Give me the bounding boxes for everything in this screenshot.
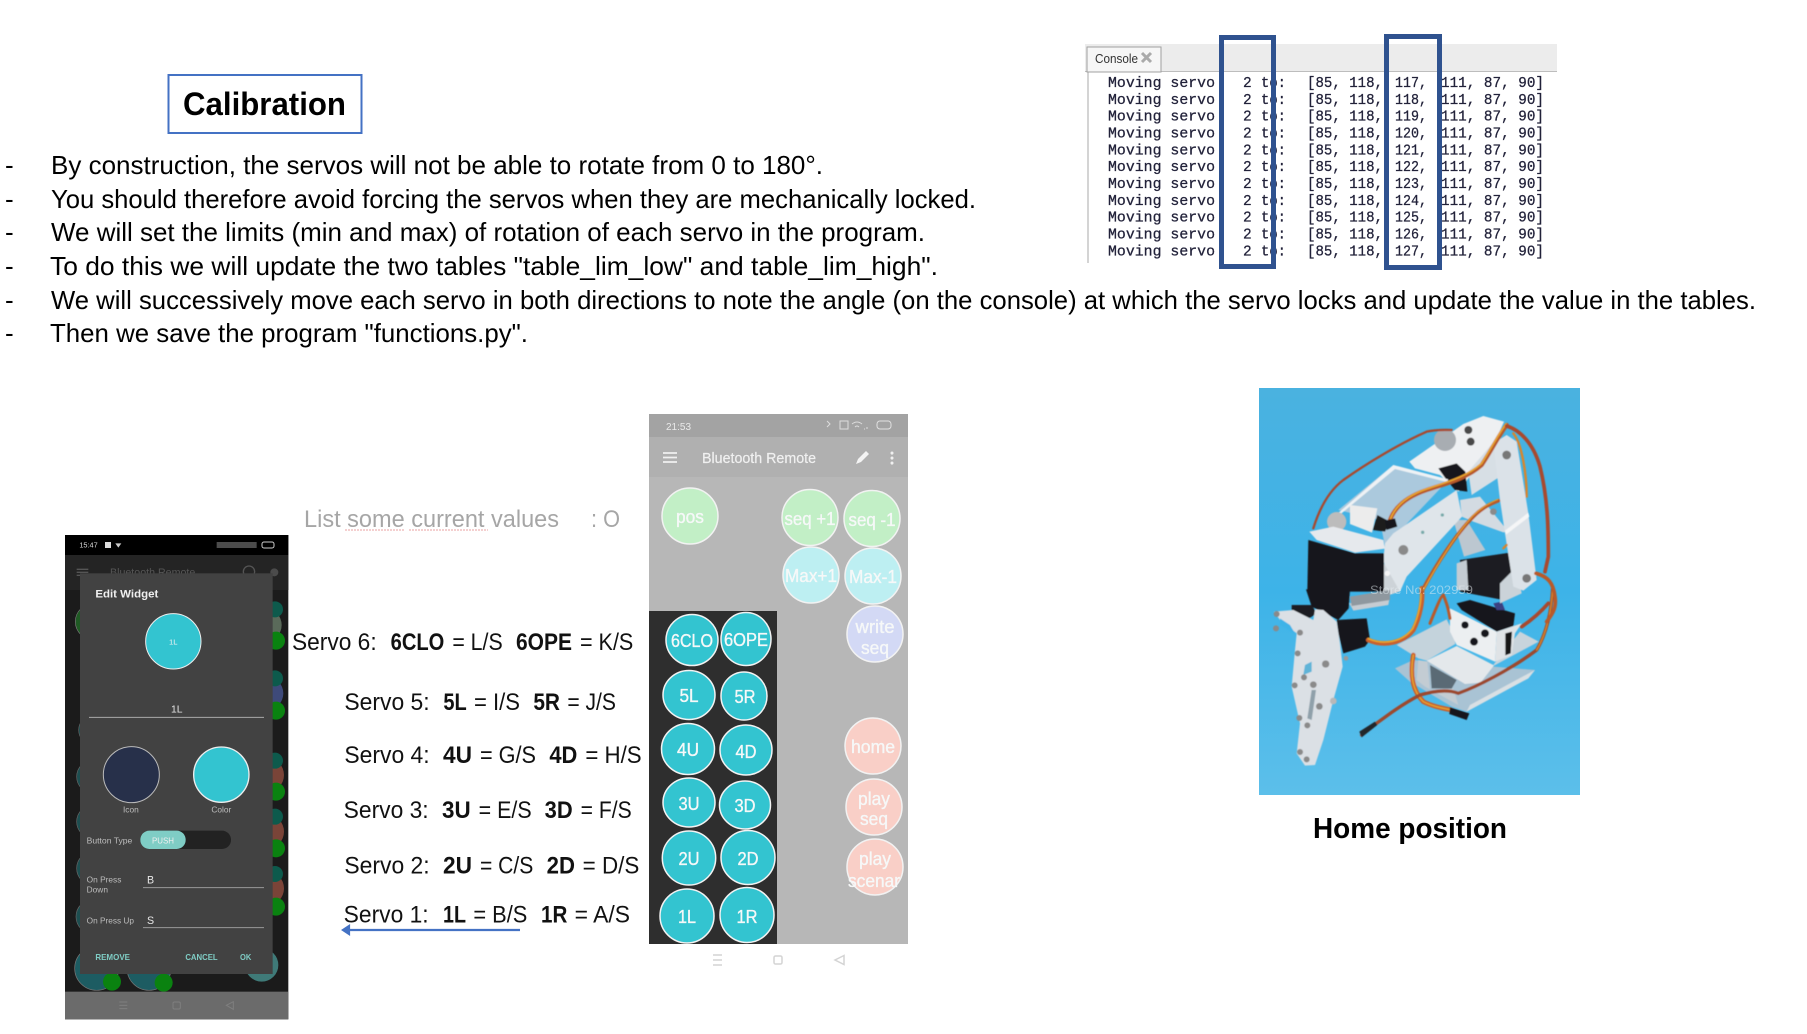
text block: servo key mappings: Servo 5: (344, 689, 430, 716)
text block: servo key mappings: = C/S (480, 852, 533, 879)
console output rows: [85, 118, (1307, 76, 1383, 92)
caption: Home position: Home position (1313, 813, 1507, 845)
console output rows: 2 (1243, 76, 1252, 92)
console output rows: Moving servo (1108, 126, 1215, 142)
text block: calibration instructions: - (5, 184, 14, 214)
control buttons: 3U (678, 794, 700, 814)
lower cables (1362, 588, 1553, 735)
elbow bracket (1338, 465, 1448, 547)
console output rows: Moving servo (1108, 194, 1215, 210)
text block: servo key mappings: 3D (545, 797, 573, 824)
console output rows: Moving servo (1108, 143, 1215, 159)
console output rows: to: (1261, 143, 1286, 159)
console output rows: 2 (1243, 93, 1252, 109)
console output rows: 111, 87, 90] (1441, 211, 1544, 227)
console output rows: to: (1261, 228, 1286, 244)
Edit Widget dialog: PUSH (152, 835, 174, 845)
control buttons: play (858, 789, 890, 809)
text block: servo key mappings: Servo 2: (344, 852, 430, 879)
lower assembly (1395, 600, 1539, 712)
control buttons: seq (861, 638, 889, 658)
console output rows: [85, 118, (1307, 228, 1383, 244)
Edit Widget dialog: Button Type (87, 835, 133, 845)
console output rows: 2 (1243, 110, 1252, 126)
control buttons: 4U (677, 740, 699, 760)
control buttons: Max+1 (785, 566, 837, 586)
control buttons: 4D (736, 742, 756, 762)
console output rows: 111, 87, 90] (1441, 143, 1544, 159)
text block: calibration instructions: - (5, 318, 14, 348)
console output rows: Moving servo (1108, 211, 1215, 227)
text block: servo key mappings: Servo 4: (344, 742, 430, 769)
console output rows: to: (1261, 194, 1286, 210)
console output rows: Moving servo (1108, 76, 1215, 92)
console output rows: to: (1261, 177, 1286, 193)
panel: Edit Widget phone screenshot: Bluetooth Remote (110, 567, 195, 579)
control buttons: seq (860, 809, 888, 829)
control buttons: 6CLO (671, 631, 713, 651)
text block: servo key mappings: 6OPE (516, 629, 572, 656)
console output rows: Moving servo (1108, 177, 1215, 193)
console output rows: to: (1261, 110, 1286, 126)
navigation icons (713, 955, 844, 965)
photo: robot arm in home position: Store No: 202959 (1370, 583, 1473, 597)
Edit Widget dialog: Edit Widget (95, 588, 159, 600)
Edit Widget dialog: On Press (87, 875, 121, 885)
console output rows: 111, 87, 90] (1441, 228, 1544, 244)
text block: servo key mappings: = K/S (580, 629, 633, 656)
text: list some current values: : O (591, 506, 620, 533)
console output rows: [85, 118, (1307, 194, 1383, 210)
console output rows: Moving servo (1108, 110, 1215, 126)
text block: servo key mappings: = D/S (583, 852, 639, 879)
text block: servo key mappings: 5L (443, 689, 467, 716)
console output rows: [85, 118, (1307, 126, 1383, 142)
Edit Widget dialog (80, 573, 273, 974)
text block: servo key mappings: 2D (547, 852, 575, 879)
console output rows: to: (1261, 76, 1286, 92)
Edit Widget dialog: 1L (169, 637, 178, 646)
console output rows: 2 (1243, 160, 1252, 176)
console output rows: [85, 118, (1307, 110, 1383, 126)
console output rows: 2 (1243, 244, 1252, 260)
text block: servo key mappings: = I/S (474, 689, 520, 716)
control buttons: play (859, 849, 891, 869)
panel: Bluetooth Remote phone screenshot: Bluetooth Remote (702, 450, 816, 467)
control buttons (660, 488, 903, 943)
console output rows: 2 (1243, 143, 1252, 159)
dimmed background buttons (75, 601, 285, 992)
text block: servo key mappings: = H/S (585, 742, 642, 769)
Edit Widget dialog: Down (87, 885, 108, 895)
console output rows: [85, 118, (1307, 177, 1383, 193)
panel: Edit Widget phone screenshot: 15:47 (79, 541, 98, 550)
control buttons: 5R (734, 687, 756, 707)
title: Calibration: Calibration (183, 86, 346, 122)
console output rows: 111, 87, 90] (1441, 244, 1544, 260)
Edit Widget dialog: S (147, 915, 154, 927)
text block: calibration instructions: We will successively move each servo in both directions to note the angle (on the console) at which the servo locks and update the value in the tables. (51, 285, 1756, 315)
Edit Widget dialog: On Press Up (87, 915, 134, 925)
console output rows: 125, (1395, 211, 1427, 227)
Edit Widget dialog: Icon (123, 805, 139, 815)
control buttons: seq -1 (848, 510, 896, 530)
console output rows: 111, 87, 90] (1441, 177, 1544, 193)
text block: servo key mappings: = J/S (567, 689, 616, 716)
console output rows: 124, (1395, 194, 1427, 210)
arrow: blue left arrow under Servo 1 (343, 926, 520, 934)
console output rows: 111, 87, 90] (1441, 110, 1544, 126)
console output rows: Moving servo (1108, 93, 1215, 109)
text block: servo key mappings: = A/S (575, 901, 630, 928)
control buttons: 3D (734, 796, 756, 816)
console output rows: 117, (1395, 76, 1427, 92)
control buttons: 5L (680, 686, 698, 706)
Edit Widget dialog: CANCEL (185, 952, 218, 962)
control buttons: 1L (678, 907, 696, 927)
panel: console screenshot (1085, 36, 1557, 268)
text block: calibration instructions: To do this we will update the two tables "table_lim_low" and table_lim_high". (50, 251, 938, 281)
control buttons: pos (676, 507, 704, 527)
console output rows: Moving servo (1108, 244, 1215, 260)
text block: calibration instructions: - (5, 150, 14, 180)
text block: servo key mappings: 1R (541, 901, 567, 928)
Edit Widget dialog: Color (211, 805, 231, 815)
control buttons: 2U (678, 849, 700, 869)
text block: servo key mappings: Servo 6: (292, 629, 377, 656)
control buttons: scenar (848, 871, 900, 891)
text block: servo key mappings: = E/S (479, 797, 532, 824)
console output rows: [85, 118, (1307, 93, 1383, 109)
console output rows: 2 (1243, 211, 1252, 227)
console output rows: 111, 87, 90] (1441, 160, 1544, 176)
text block: servo key mappings: 1L (443, 901, 466, 928)
text block: servo key mappings: = B/S (473, 901, 527, 928)
rear strut, back servo and long arm (1307, 416, 1537, 603)
title: Calibration (168, 75, 362, 133)
text block: servo key mappings: 3U (442, 797, 471, 824)
text block: calibration instructions: By construction, the servos will not be able to rotate from 0 to 180°. (51, 150, 823, 180)
text block: servo key mappings: 4D (549, 742, 577, 769)
text block: calibration instructions: - (5, 217, 14, 247)
highlight box: servo number column (1222, 38, 1274, 266)
text block: servo key mappings: Servo 3: (344, 797, 429, 824)
upper cables (1313, 424, 1555, 622)
console output rows: 111, 87, 90] (1441, 126, 1544, 142)
control buttons: 1R (736, 907, 758, 927)
console output rows: to: (1261, 211, 1286, 227)
console output rows: to: (1261, 93, 1286, 109)
console output rows (1108, 76, 1544, 260)
console tab (1087, 47, 1161, 72)
control buttons: home (851, 737, 895, 757)
console output rows: [85, 118, (1307, 160, 1383, 176)
console output rows: to: (1261, 244, 1286, 260)
console output rows: 122, (1395, 160, 1427, 176)
text block: servo key mappings: = G/S (480, 742, 536, 769)
text block: calibration instructions (5, 150, 1756, 348)
console output rows: 2 (1243, 228, 1252, 244)
text block: servo key mappings (292, 629, 642, 928)
panel: Edit Widget phone screenshot (65, 535, 288, 1019)
text block: servo key mappings: 2U (443, 852, 472, 879)
console output rows: [85, 118, (1307, 143, 1383, 159)
dark button column background (649, 611, 777, 944)
text block: servo key mappings: = L/S (452, 629, 503, 656)
text: list some current values: List some current values (304, 506, 559, 533)
console output rows: 2 (1243, 194, 1252, 210)
console output rows: 111, 87, 90] (1441, 194, 1544, 210)
console output rows: 121, (1395, 143, 1427, 159)
console output rows: 126, (1395, 228, 1427, 244)
large servo lower, gripper (1273, 588, 1553, 766)
highlight box: angle column (1386, 36, 1440, 268)
control buttons: 2D (738, 849, 758, 869)
console output rows: Moving servo (1108, 228, 1215, 244)
console output rows: 127, (1395, 244, 1427, 260)
text block: servo key mappings: 6CLO (391, 629, 444, 656)
console output rows: [85, 118, (1307, 211, 1383, 227)
text block: servo key mappings: 4U (443, 742, 472, 769)
console output rows: [85, 118, (1307, 244, 1383, 260)
Edit Widget dialog: REMOVE (95, 952, 130, 962)
console tab: Console (1095, 51, 1138, 66)
text block: servo key mappings: Servo 1: (344, 901, 429, 928)
panel: Bluetooth Remote phone screenshot (649, 414, 908, 965)
text block: calibration instructions: Then we save the program "functions.py". (50, 318, 528, 348)
text block: calibration instructions: - (5, 251, 14, 281)
text block: calibration instructions: - (5, 285, 14, 315)
text block: servo key mappings: 5R (533, 689, 560, 716)
console output rows: 2 (1243, 177, 1252, 193)
text block: calibration instructions: We will set the limits (min and max) of rotation of each servo in the program. (51, 217, 925, 247)
console output rows: 2 (1243, 126, 1252, 142)
photo: robot arm in home position (1259, 388, 1580, 795)
control buttons: 6OPE (724, 630, 768, 650)
console output rows: 119, (1395, 110, 1427, 126)
control buttons: write (854, 617, 894, 637)
console output rows: 118, (1395, 93, 1427, 109)
console output rows: to: (1261, 126, 1286, 142)
console output rows: 123, (1395, 177, 1427, 193)
console output rows: 120, (1395, 126, 1427, 142)
panel: Bluetooth Remote phone screenshot: 21:53 (666, 422, 691, 433)
console output rows: Moving servo (1108, 160, 1215, 176)
Edit Widget dialog: OK (240, 952, 251, 962)
Edit Widget dialog: 1L (171, 705, 183, 716)
console output rows: 111, 87, 90] (1441, 93, 1544, 109)
control buttons: Max-1 (849, 567, 897, 587)
text block: calibration instructions: You should therefore avoid forcing the servos when they are mechanically locked. (51, 184, 976, 214)
Edit Widget dialog: B (147, 874, 154, 886)
text block: servo key mappings: = F/S (581, 797, 632, 824)
console output rows: to: (1261, 160, 1286, 176)
console output rows: 111, 87, 90] (1441, 76, 1544, 92)
control buttons: seq +1 (784, 509, 836, 529)
